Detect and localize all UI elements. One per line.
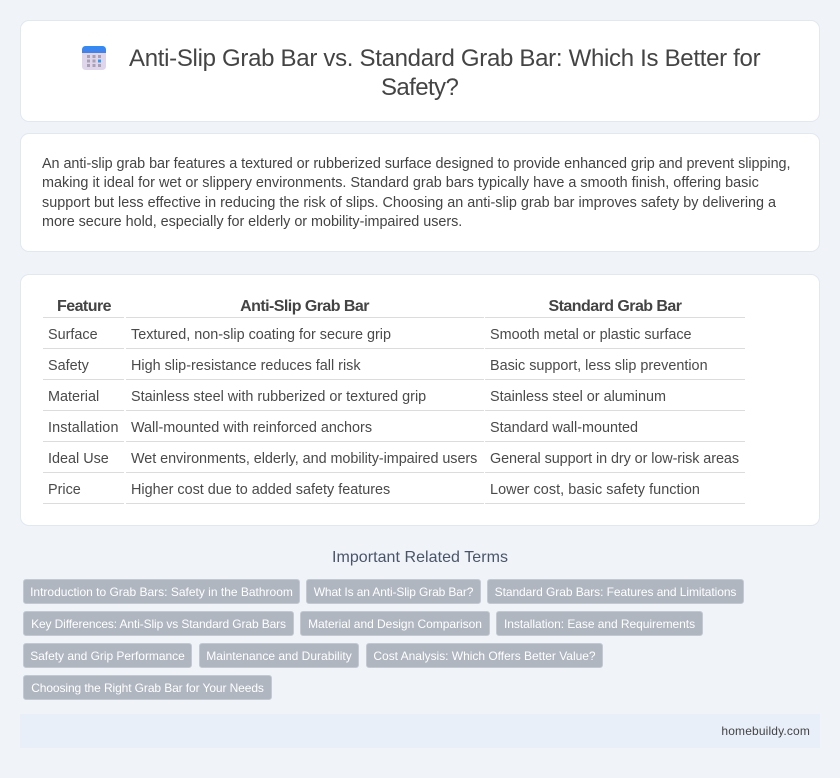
table row: Installation: Wall-mounted with reinforced anchors: [131, 420, 372, 436]
table row: Material: Stainless steel or aluminum: [490, 389, 666, 405]
tag: [300, 611, 490, 636]
table header: Anti-Slip Grab Bar: Anti-Slip Grab Bar: [240, 298, 369, 315]
tag: Standard Grab Bars: Features and Limitations: [495, 585, 736, 599]
text block: line 1: An anti-slip grab bar features a textured or rubberized surface designed to provide enhanced grip and prevent slipping,: [42, 156, 790, 172]
tag: Safety and Grip Performance: [30, 649, 185, 663]
tag: Installation: Ease and Requirements: [504, 617, 695, 631]
table row: Ideal Use: [48, 451, 739, 467]
tag: Cost Analysis: Which Offers Better Value?: [373, 649, 596, 663]
footer: [20, 714, 820, 748]
table row: Price: Higher cost due to added safety features: [131, 482, 390, 498]
icon: calendar: [82, 46, 106, 70]
table row: Surface: Textured, non-slip coating for secure grip: [131, 327, 391, 343]
table row: Surface: Smooth metal or plastic surface: [490, 327, 692, 343]
table row: Material: [48, 389, 666, 405]
table row: Ideal Use: Ideal Use: [48, 451, 109, 467]
table row: Installation: Standard wall-mounted: [490, 420, 638, 436]
table row: Safety: High slip-resistance reduces fall risk: [131, 358, 361, 374]
text block: line 3: support but less effective in reducing the risk of slips. Choosing an anti-slip grab bar improves safety by delivering a: [42, 195, 776, 211]
title: Safety?: [381, 74, 458, 101]
table row: Price: Price: [48, 482, 81, 498]
table row: Safety: [48, 358, 708, 374]
table row: Safety: Safety: [48, 358, 89, 374]
tag: [23, 611, 294, 636]
table row: Surface: [48, 327, 692, 343]
table row: Installation: [48, 420, 638, 436]
title: Anti-Slip Grab Bar vs. Standard Grab Bar: Which Is Better for: [129, 45, 760, 72]
tag: Introduction to Grab Bars: Safety in the Bathroom: [30, 585, 293, 599]
table row: Ideal Use: General support in dry or low-risk areas: [490, 451, 739, 467]
table row: Material: Material: [48, 389, 99, 405]
tag: Key Differences: Anti-Slip vs Standard Grab Bars: [31, 617, 286, 631]
tag list: related terms: [23, 579, 744, 700]
tag: [199, 643, 359, 668]
tag: What Is an Anti-Slip Grab Bar?: [314, 585, 473, 599]
tag: [23, 643, 192, 668]
table row: Surface: Surface: [48, 327, 98, 343]
tag: Material and Design Comparison: [308, 617, 482, 631]
table row: Material: Stainless steel with rubberized or textured grip: [131, 389, 426, 405]
tag: Maintenance and Durability: [206, 649, 352, 663]
text block: line 4: more secure hold, especially for elderly or mobility-impaired users.: [42, 214, 462, 230]
footer source text: homebuildy.com: [721, 724, 810, 738]
tag: [496, 611, 703, 636]
table row: Ideal Use: Wet environments, elderly, and mobility-impaired users: [131, 451, 477, 467]
panel: header: [20, 20, 820, 122]
tag: [306, 579, 481, 604]
panel: comparison table: [20, 274, 820, 526]
table header: Standard Grab Bar: Standard Grab Bar: [549, 298, 681, 315]
tag: Choosing the Right Grab Bar for Your Needs: [31, 681, 264, 695]
table row: Safety: Basic support, less slip prevention: [490, 358, 708, 374]
tag: [487, 579, 744, 604]
table row: Installation: Installation: [48, 420, 119, 436]
tag: [23, 579, 300, 604]
tag: [366, 643, 603, 668]
tag: [23, 675, 272, 700]
heading: related terms: Important Related Terms: [332, 549, 508, 566]
text block: line 2: making it ideal for wet or slippery environments. Standard grab bars typically have a smooth finish, offering basic: [42, 175, 759, 191]
table header: Feature: Feature: [57, 298, 111, 315]
table row: Price: [48, 482, 700, 498]
title: [129, 45, 760, 101]
panel: introduction text: [20, 133, 820, 252]
table row: Price: Lower cost, basic safety function: [490, 482, 700, 498]
